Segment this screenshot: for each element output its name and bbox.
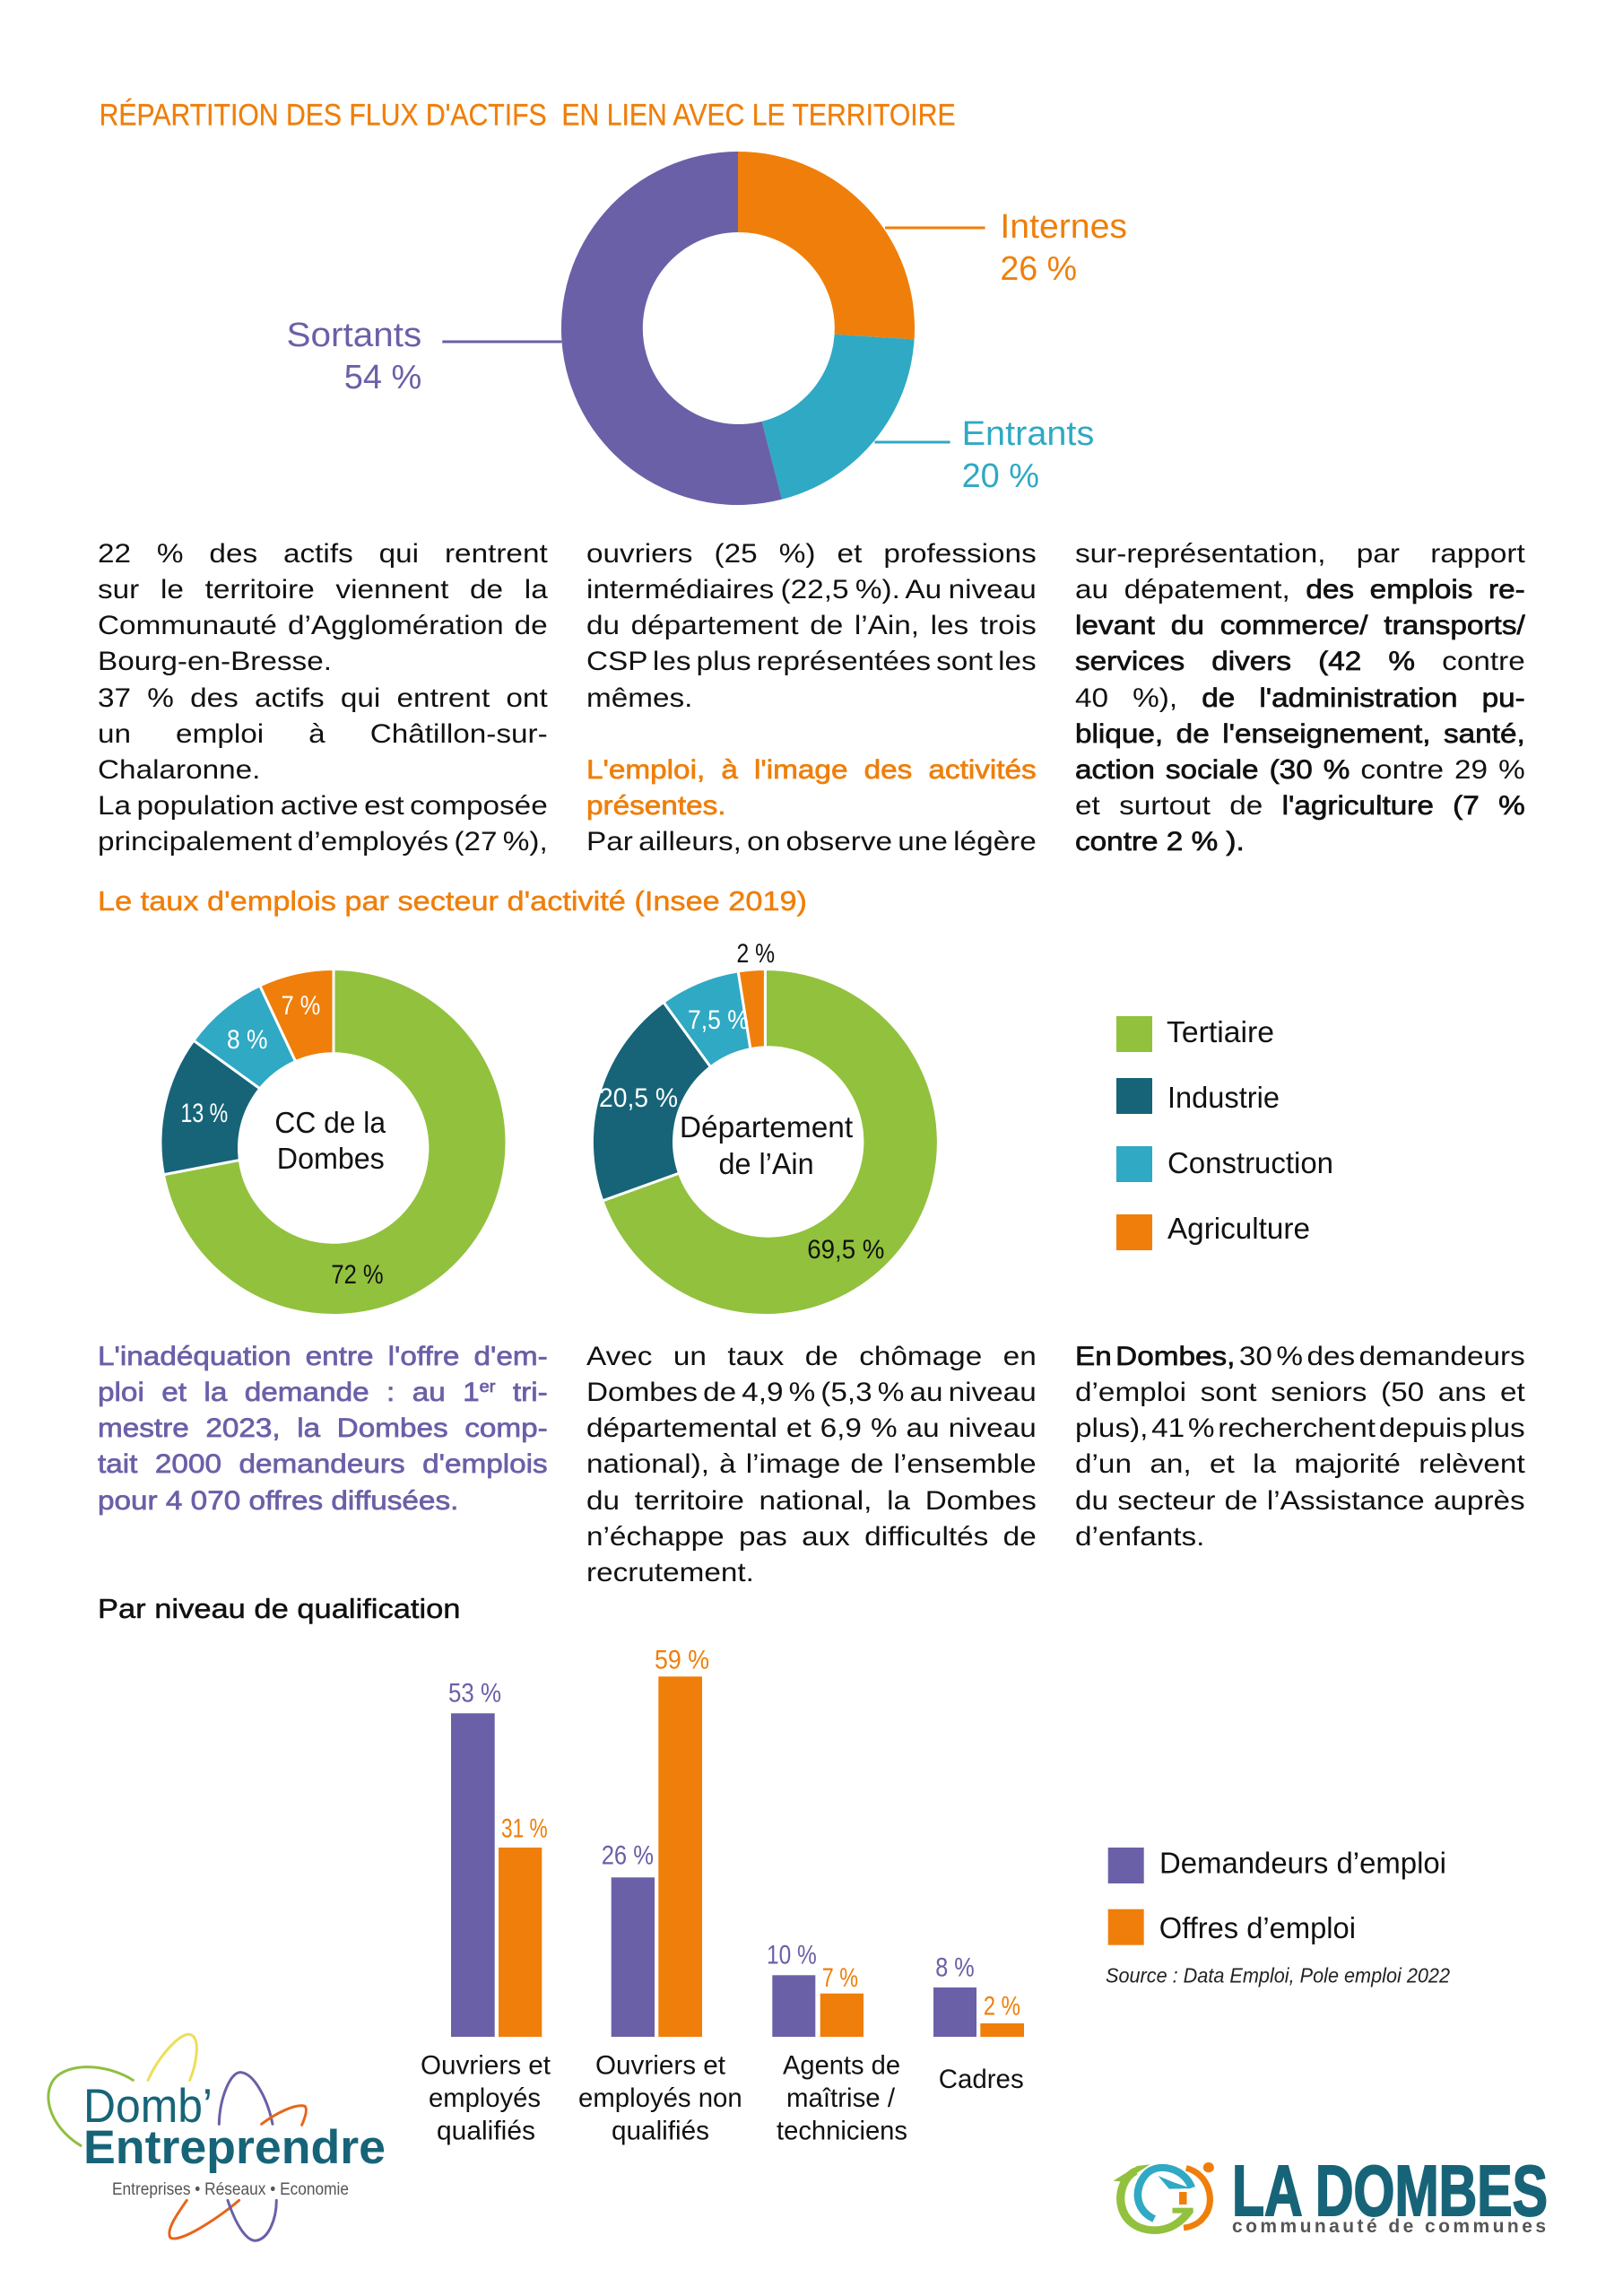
text block: column 1 top: un emploi à Châtillon-sur- <box>98 719 548 749</box>
bar chart: qualification: 31 % <box>501 1813 548 1843</box>
label: Internes: Internes <box>1000 208 1127 246</box>
label: Internes <box>885 208 1127 288</box>
text block: column 1 top: La population active est composée <box>98 791 548 821</box>
donut chart: CC de la Dombes: Dombes <box>277 1142 385 1175</box>
heading: taux d'emplois: Le taux d'emplois par secteur d'activité (Insee 2019) <box>98 885 807 917</box>
logo: Domb'Entreprendre <box>48 2034 386 2240</box>
text block: taux de chômage: recrutement. <box>586 1558 754 1587</box>
text block: column 3 top <box>1075 539 1526 857</box>
bar chart: qualification: employés <box>429 2083 541 2113</box>
label: Sortants <box>287 317 561 396</box>
text block: column 1 top: Bourg-en-Bresse. <box>98 647 332 676</box>
donut chart: Département de l'Ain: de l’Ain <box>719 1147 814 1180</box>
donut chart: CC de la Dombes: 13 % <box>181 1099 228 1128</box>
legend: demandeurs et offres <box>1108 1846 1446 1945</box>
text block: column 2 top: CSP les plus représentées sont les <box>586 647 1037 676</box>
callout: inadéquation offre et demande: tait 2000 demandeurs d'emplois <box>98 1449 548 1479</box>
text block: taux de chômage: Dombes de 4,9 % (5,3 % au niveau <box>586 1378 1037 1407</box>
bar chart: qualification: 7 % <box>822 1963 858 1993</box>
donut chart: Département de l'Ain: 7,5 % <box>688 1005 749 1035</box>
text block: En Dombes <box>1075 1342 1525 1552</box>
text block: column 3 top: levant du commerce/ transports/ <box>1075 611 1525 640</box>
text block: column 2 top: Par ailleurs, on observe une légère <box>586 827 1037 857</box>
bar chart: qualification: qualifiés <box>437 2117 535 2146</box>
callout: inadéquation offre et demande: L'inadéquation entre l'offre d'em- <box>98 1342 548 1371</box>
text block: column 2 top: mêmes. <box>586 683 693 713</box>
bar chart: qualification: 10 % <box>767 1940 817 1970</box>
callout: inadéquation offre et demande: pour 4 070 offres diffusées. <box>98 1486 458 1516</box>
text block: column 3 top: blique, de l'enseignement, santé, <box>1075 719 1525 749</box>
text block: En Dombes: En Dombes, 30 % des demandeurs <box>1075 1342 1525 1371</box>
text block: taux de chômage: n’échappe pas aux difficultés de <box>586 1522 1037 1552</box>
bar chart: qualification: 8 % <box>935 1952 975 1982</box>
text block: column 1 top: sur le territoire viennent de la <box>98 575 548 604</box>
text block: column 1 top: Communauté d’Agglomération de <box>98 611 548 640</box>
text block: column 2 top: intermédiaires (22,5 %). Au niveau <box>586 575 1037 604</box>
text block: En Dombes: d’enfants. <box>1075 1522 1204 1552</box>
text block: column 1 top: principalement d’employés (27 %), <box>98 827 548 857</box>
text block: column 3 top: sur-représentation, par rapport <box>1075 539 1525 569</box>
logo: La Dombes <box>1113 2151 1548 2237</box>
donut chart: CC de la Dombes: CC de la <box>274 1106 386 1139</box>
donut chart: CC de la Dombes: 7 % <box>282 991 320 1021</box>
bar chart: qualification: Agents de <box>783 2050 900 2080</box>
label: Entrants <box>874 415 1094 495</box>
text block: column 3 top: action sociale (30 % contre 29 % <box>1075 755 1525 785</box>
donut chart: Département de l'Ain: 20,5 % <box>599 1083 678 1113</box>
legend: demandeurs et offres: Demandeurs d’emploi <box>1159 1846 1446 1879</box>
bar chart: qualification: Cadres <box>939 2065 1024 2094</box>
text block: column 2 top: ouvriers (25 %) et professions <box>586 539 1037 569</box>
bar chart: qualification: qualifiés <box>612 2117 709 2146</box>
text block: taux de chômage: Avec un taux de chômage en <box>586 1342 1037 1371</box>
label: Entrants: Entrants <box>962 415 1094 453</box>
callout: inadéquation offre et demande <box>98 1342 548 1516</box>
logo: Domb'Entreprendre: Entreprises • Réseaux • Economie <box>112 2180 349 2199</box>
legend: demandeurs et offres: Offres d’emploi <box>1159 1911 1356 1944</box>
donut chart: Département de l'Ain: 69,5 % <box>807 1235 884 1265</box>
text block: column 3 top: services divers (42 % contre <box>1075 647 1525 676</box>
bar chart: qualification: maîtrise / <box>786 2083 896 2113</box>
legend: secteurs: Construction <box>1167 1146 1333 1179</box>
text block: taux de chômage: départemental et 6,9 % au niveau <box>586 1413 1037 1443</box>
title: RÉPARTITION DES FLUX D'ACTIFS EN LIEN AVEC LE TERRITOIRE <box>100 99 956 133</box>
heading: par niveau de qualification: Par niveau de qualification <box>98 1593 461 1624</box>
bar chart: qualification: 2 % <box>984 1992 1020 2022</box>
label: Sortants: 54 % <box>344 359 421 396</box>
text block: column 3 top: 40 %), de l'administration pu- <box>1075 683 1525 713</box>
bar chart: qualification: Ouvriers et <box>421 2050 551 2080</box>
text block: column 3 top: contre 2 % ). <box>1075 827 1245 857</box>
text block: column 1 top <box>98 539 548 857</box>
logo: Domb'Entreprendre: Entreprendre <box>83 2121 386 2174</box>
bar chart: qualification: 59 % <box>655 1646 709 1675</box>
callout: inadéquation offre et demande: mestre 2023, la Dombes comp- <box>98 1413 548 1443</box>
label: Entrants: 20 % <box>962 457 1039 495</box>
callout: inadéquation offre et demande: ploi et la demande : au 1er tri- <box>98 1378 548 1407</box>
legend: secteurs: Industrie <box>1167 1081 1280 1114</box>
legend: secteurs: Agriculture <box>1167 1212 1310 1245</box>
bar chart: qualification: techniciens <box>777 2117 907 2146</box>
text block: En Dombes: du secteur de l’Assistance auprès <box>1075 1486 1525 1516</box>
text block: En Dombes: d’emploi sont seniors (50 ans et <box>1075 1378 1525 1407</box>
text block: column 2 top: L'emploi, à l'image des activités <box>586 755 1037 785</box>
donut chart: CC de la Dombes: 72 % <box>331 1260 384 1290</box>
legend: secteurs: Tertiaire <box>1167 1015 1274 1048</box>
text block: column 1 top: 37 % des actifs qui entrent ont <box>98 683 548 713</box>
label: Internes: 26 % <box>1000 250 1077 288</box>
donut chart: Département de l'Ain <box>592 939 938 1316</box>
bar chart: qualification: employés non <box>578 2083 742 2113</box>
text block: column 1 top: Chalaronne. <box>98 755 260 785</box>
text block: taux de chômage: du territoire national, la Dombes <box>586 1486 1037 1516</box>
donut chart: CC de la Dombes <box>161 969 507 1315</box>
bar chart: qualification: 53 % <box>448 1678 501 1708</box>
bar chart: qualification: Ouvriers et <box>595 2050 726 2080</box>
text block: column 2 top: présentes. <box>586 791 726 821</box>
logo: Domb'Entreprendre: Domb’ <box>83 2080 213 2133</box>
text block: En Dombes: plus), 41 % recherchent depuis plus <box>1075 1413 1525 1443</box>
donut chart: CC de la Dombes: 8 % <box>227 1025 267 1055</box>
text block: taux de chômage: national), à l’image de l’ensemble <box>586 1449 1037 1479</box>
text block: taux de chômage <box>586 1342 1037 1587</box>
text block: column 2 top: du département de l’Ain, les trois <box>586 611 1037 640</box>
donut chart: Département de l'Ain: Département <box>680 1110 853 1144</box>
bar chart: qualification <box>421 1646 1024 2146</box>
legend: secteurs <box>1116 1015 1333 1250</box>
source note: Source : Data Emploi, Pole emploi 2022 <box>1106 1964 1450 1987</box>
text block: column 2 top <box>586 539 1037 857</box>
text block: column 1 top: 22 % des actifs qui rentrent <box>98 539 548 569</box>
text block: column 3 top: et surtout de l'agriculture (7 % <box>1075 791 1525 821</box>
donut chart: flux d'actifs <box>561 152 915 505</box>
text block: column 3 top: au dépatement, des emplois re- <box>1075 575 1525 604</box>
bar chart: qualification: 26 % <box>602 1840 654 1870</box>
label: Sortants: Sortants <box>287 317 421 354</box>
logo: La Dombes: communauté de communes <box>1232 2216 1546 2237</box>
text block: En Dombes: d’un an, et la majorité relèvent <box>1075 1449 1525 1479</box>
donut chart: Département de l'Ain: 2 % <box>737 939 775 969</box>
